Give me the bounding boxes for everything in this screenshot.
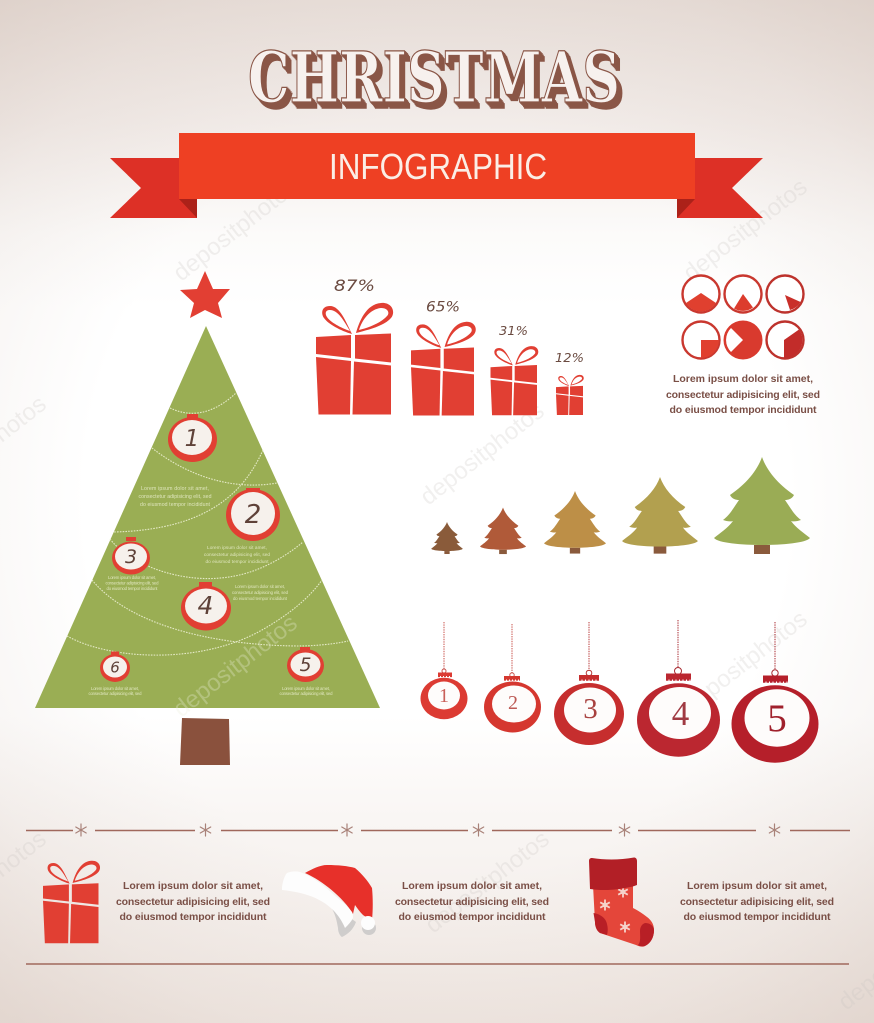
- fir 3: [544, 491, 606, 554]
- bauble 2: [484, 624, 541, 732]
- hanging baubles: [420, 620, 818, 763]
- ornament 6: [100, 652, 130, 682]
- pie 4: [682, 322, 720, 358]
- tree caption 5: consectetur adipisicing elit, sed: [280, 691, 333, 696]
- bauble 2: 2: [508, 692, 518, 714]
- ornament 2: [226, 488, 280, 541]
- ribbon banner: [110, 133, 763, 218]
- tree caption 1: do eiusmod tempor incididunt: [140, 502, 211, 508]
- bauble 5: [732, 622, 818, 763]
- pie 6: [766, 322, 804, 358]
- gift 65%: [411, 300, 476, 416]
- ornament 2: 2: [245, 500, 261, 530]
- bottom text 1: consectetur adipisicing elit, sed: [116, 896, 270, 908]
- tree caption 2: do eiusmod tempor incididunt: [206, 559, 269, 564]
- bauble 4: 4: [672, 694, 689, 733]
- gift size chart: [316, 276, 584, 416]
- tree caption 2: consectetur adipisicing elit, sed: [204, 552, 270, 557]
- tree caption 6: Lorem ipsum dolor sit amet,: [91, 686, 139, 691]
- tree caption 2: [204, 545, 270, 564]
- tree caption 5: [280, 686, 333, 696]
- tree caption 4: consectetur adipisicing elit, sed: [232, 590, 289, 595]
- icon: santa hat: [282, 865, 376, 937]
- title: Christmas: CHRISTMAS: [250, 38, 622, 121]
- bauble 1: [420, 622, 468, 719]
- fir 5: [714, 457, 810, 554]
- gift 65%: 65%: [426, 300, 460, 316]
- fir 1: [431, 522, 463, 554]
- title: Christmas: CHRISTMAS: [251, 39, 623, 122]
- ornament 1: 1: [185, 426, 199, 452]
- bottom text 3: do eiusmod tempor incididunt: [684, 911, 831, 923]
- bauble 1: 1: [439, 685, 449, 707]
- tree caption 1: Lorem ipsum dolor sit amet,: [141, 486, 209, 492]
- ornament 6: 6: [110, 658, 120, 676]
- ornament 3: [112, 537, 150, 574]
- fir 4: [622, 477, 698, 554]
- title: Christmas: CHRISTMAS: [253, 42, 625, 125]
- pie 1: [682, 276, 720, 312]
- growing fir trees: [431, 457, 810, 554]
- icon: stocking: [589, 858, 654, 947]
- gift 87%: [316, 276, 393, 414]
- text: depositphotos: [678, 605, 813, 719]
- gift 31%: [490, 323, 538, 415]
- ornament 5: 5: [299, 654, 312, 676]
- tree caption 6: consectetur adipisicing elit, sed: [88, 691, 142, 696]
- tree caption 1: [138, 486, 212, 508]
- text: depositphotos: [168, 173, 303, 287]
- ornament 5: [287, 647, 324, 682]
- tree caption 4: [232, 584, 289, 601]
- ornament 3: 3: [125, 546, 137, 568]
- pie caption: Lorem ipsum dolor sit amet,: [673, 373, 813, 385]
- trunk: [180, 718, 230, 765]
- bottom text 1: do eiusmod tempor incididunt: [120, 911, 267, 923]
- title: Christmas: CHRISTMAS: [252, 40, 624, 124]
- title: Christmas: CHRISTMAS: [248, 36, 620, 119]
- bottom text 2: do eiusmod tempor incididunt: [398, 911, 546, 923]
- bauble 4: [637, 620, 720, 757]
- gift 87%: 87%: [334, 276, 375, 295]
- text: depositphotos: [420, 825, 555, 939]
- pie caption: consectetur adipisicing elit, sed: [666, 389, 820, 401]
- big christmas tree: depositphotos: [168, 609, 303, 723]
- tree body: [35, 326, 380, 708]
- bottom text 3: Lorem ipsum dolor sit amet,: [687, 880, 827, 892]
- pie 5: [724, 320, 762, 360]
- bottom text 3: consectetur adipisicing elit, sed: [680, 896, 834, 908]
- fir 2: [480, 508, 526, 554]
- tree caption 6: [88, 686, 142, 696]
- text: depositphotos: [415, 397, 550, 511]
- bottom text 1: [116, 880, 270, 923]
- pie 3: [766, 276, 804, 312]
- text: depositphotos: [678, 173, 813, 287]
- bottom text 3: [680, 880, 834, 923]
- gift 12%: 12%: [555, 351, 584, 365]
- bottom text 2: consectetur adipisicing elit, sed: [395, 896, 549, 908]
- star: [180, 271, 230, 318]
- tree caption 3: do eiusmod tempor incididunt: [106, 586, 158, 591]
- garlands: [67, 393, 348, 655]
- tree caption 4: do eiusmod tempor incididunt: [233, 596, 288, 601]
- title: Christmas: CHRISTMAS: [249, 37, 621, 120]
- pie chart icons: [666, 276, 820, 416]
- ornament 4: [181, 582, 231, 630]
- big christmas tree: [35, 271, 380, 765]
- tree caption 4: Lorem ipsum dolor sit amet,: [235, 584, 285, 589]
- bottom text 2: Lorem ipsum dolor sit amet,: [402, 880, 542, 892]
- banner text: INFOGRAPHIC: [329, 146, 547, 187]
- pie 2: [724, 276, 762, 312]
- tree caption 1: consectetur adipisicing elit, sed: [138, 494, 212, 500]
- tree caption 2: Lorem ipsum dolor sit amet,: [207, 545, 267, 550]
- bauble 3: 3: [583, 693, 598, 725]
- bottom text 2: [395, 880, 549, 923]
- tree caption 5: Lorem ipsum dolor sit amet,: [282, 686, 330, 691]
- tree caption 3: Lorem ipsum dolor sit amet,: [108, 575, 156, 580]
- pie caption: do eiusmod tempor incididunt: [670, 404, 817, 416]
- gift 31%: 31%: [499, 323, 528, 338]
- pie caption: [666, 373, 820, 416]
- ornament 4: 4: [198, 591, 213, 620]
- tree caption 3: [106, 575, 159, 591]
- bauble 5: 5: [767, 697, 787, 740]
- bottom text 1: Lorem ipsum dolor sit amet,: [123, 880, 263, 892]
- ornament 1: [168, 414, 217, 462]
- bauble 3: [554, 622, 624, 745]
- tree caption 3: consectetur adipisicing elit, sed: [106, 580, 159, 586]
- icon: gift: [43, 861, 100, 943]
- gift 12%: [555, 351, 584, 415]
